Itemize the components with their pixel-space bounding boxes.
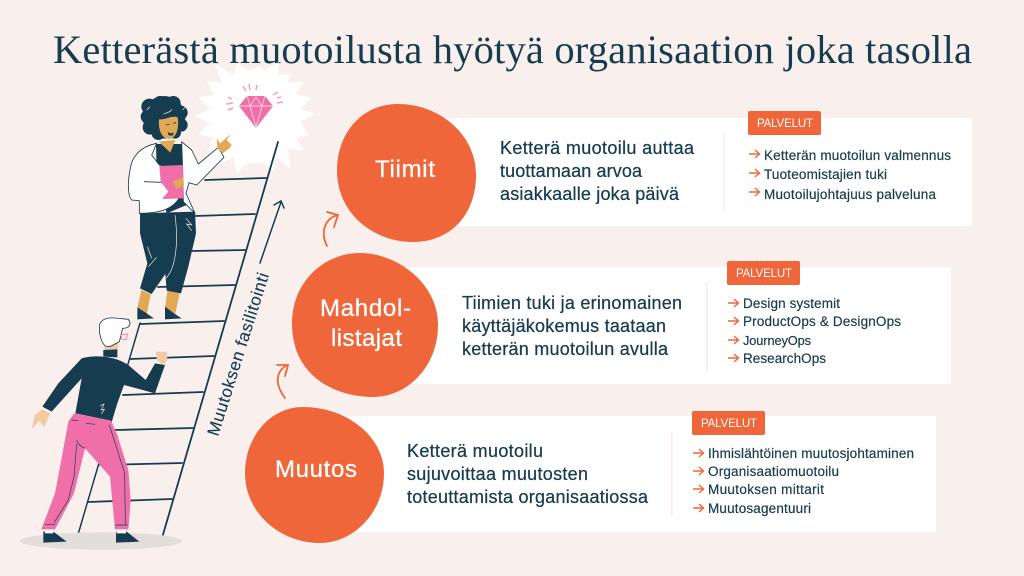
tag: palvelut — [692, 411, 765, 435]
ladder label: Muutoksen fasilitointi — [204, 270, 273, 438]
arrow: Mahdollistajat to Tiimit — [324, 212, 338, 246]
text: Mahdollistajat description — [462, 293, 682, 359]
text: Muutos description: toteuttamista organisaatiossa — [407, 487, 649, 507]
tag: palvelut: PALVELUT — [736, 268, 792, 280]
ladder arrow — [260, 201, 284, 263]
list: Tiimit services — [749, 148, 951, 202]
list: Muutos services: Muutoksen mittarit — [708, 482, 824, 497]
heading: Muutos: Muutos — [275, 456, 357, 483]
blob: Tiimit — [337, 104, 476, 242]
list: Tiimit services: Tuoteomistajien tuki — [764, 167, 887, 182]
text: Tiimit description: asiakkaalle joka päivä — [500, 184, 680, 204]
blob: Muutos — [245, 407, 384, 543]
divider — [723, 132, 724, 212]
text: Tiimit description: Ketterä muotoilu auttaa — [500, 138, 695, 158]
list: Muutos services — [693, 446, 914, 516]
panel: Muutos — [245, 407, 936, 543]
list: Mahdollistajat services — [728, 296, 901, 366]
tag: palvelut: PALVELUT — [757, 118, 813, 130]
title: Ketterästä muotoilusta hyötyä organisaation joka tasolla — [53, 27, 972, 72]
list: Mahdollistajat services: ProductOps & DesignOps — [743, 314, 901, 329]
figure: woman with clipboard — [128, 96, 232, 319]
figure: man climbing — [20, 318, 182, 550]
text: Muutos description: Ketterä muotoilu — [407, 441, 543, 461]
icon: starburst with diamond — [195, 62, 315, 174]
list: Mahdollistajat services: JourneyOps — [743, 333, 811, 348]
text: Mahdollistajat description: käyttäjäkokemus taataan — [462, 316, 666, 336]
text: Mahdollistajat description: ketterän muotoilun avulla — [462, 339, 669, 359]
tag: palvelut: PALVELUT — [701, 418, 757, 430]
tag: palvelut — [748, 111, 821, 135]
text: Mahdollistajat description: Tiimien tuki ja erinomainen — [462, 293, 682, 313]
heading: Tiimit: Tiimit — [375, 156, 435, 183]
list: Mahdollistajat services: ResearchOps — [743, 351, 826, 366]
divider — [671, 431, 672, 517]
arrow: Muutos to Mahdollistajat — [277, 365, 288, 398]
list: Muutos services: Ihmislähtöinen muutosjohtaminen — [708, 446, 914, 461]
panel: Tiimit — [337, 104, 972, 242]
text: Muutos description: sujuvoittaa muutosten — [407, 464, 588, 484]
heading: Mahdollistajat: listajat — [331, 325, 402, 352]
heading: Mahdollistajat — [320, 295, 411, 352]
list: Tiimit services: Muotoilujohtajuus palveluna — [764, 187, 936, 202]
tag: palvelut — [727, 261, 800, 285]
ladder — [77, 142, 278, 538]
text: Tiimit description: tuottamaan arvoa — [500, 161, 643, 181]
heading: Mahdollistajat: Mahdol- — [320, 295, 411, 322]
text: Muutos description — [407, 441, 649, 507]
blob: Mahdollistajat — [292, 253, 438, 397]
text: Tiimit description — [500, 138, 695, 204]
list: Muutos services: Muutosagentuuri — [708, 501, 811, 516]
divider — [706, 282, 708, 372]
list: Muutos services: Organisaatiomuotoilu — [708, 464, 839, 479]
list: Tiimit services: Ketterän muotoilun valmennus — [764, 148, 951, 163]
list: Mahdollistajat services: Design systemit — [743, 296, 840, 311]
panel: Mahdollistajat — [292, 253, 951, 397]
